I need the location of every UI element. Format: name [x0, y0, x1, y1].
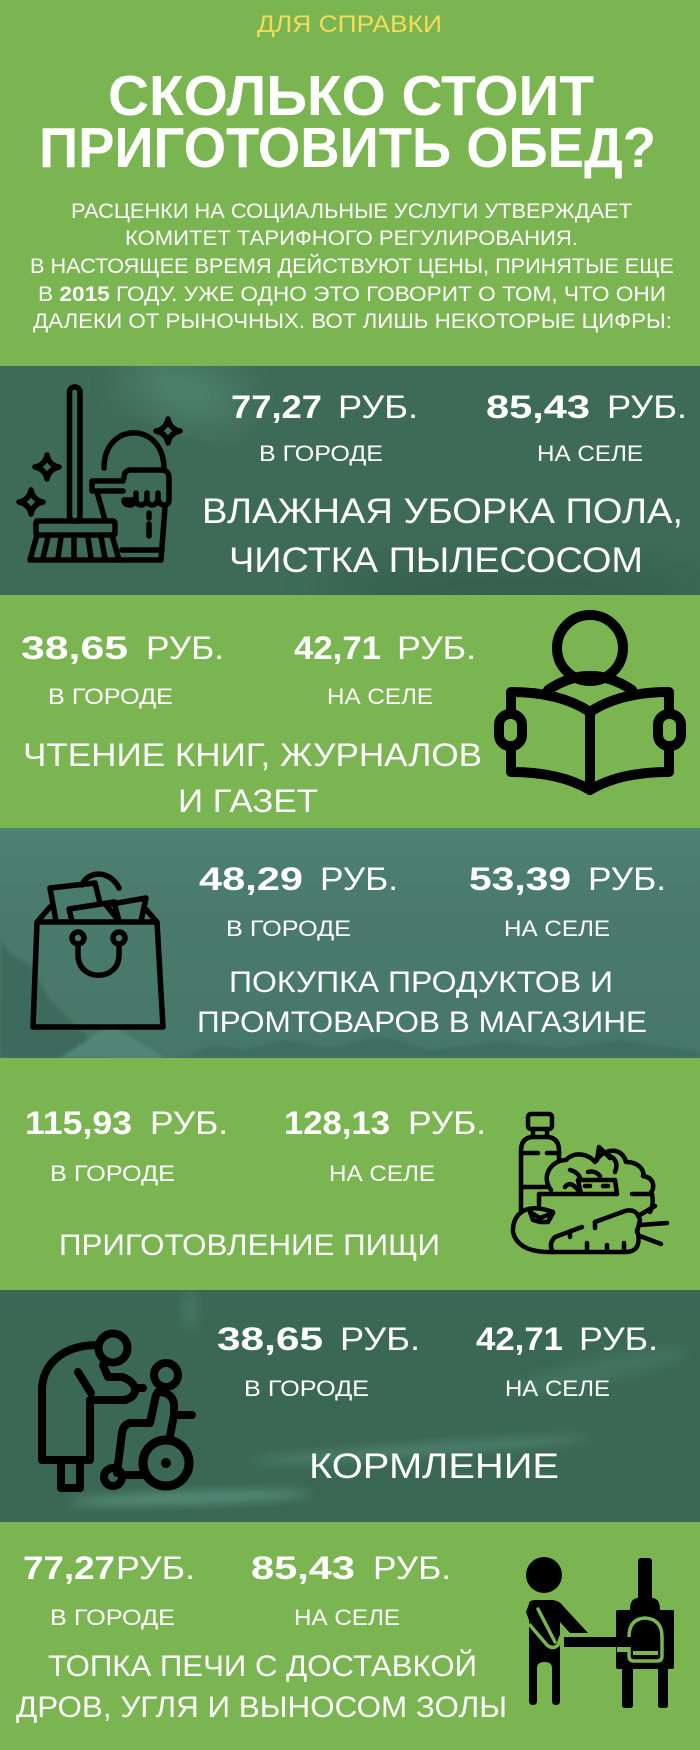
- heading: ЧИСТКА ПЫЛЕСОСОМ: [229, 541, 643, 580]
- icon: shopping bag: [33, 874, 163, 1027]
- prices: city: РУБ.: [338, 389, 418, 425]
- title: ПРИГОТОВИТЬ ОБЕД?: [39, 116, 656, 180]
- prices: city: [25, 1105, 228, 1186]
- intro text: КОМИТЕТ ТАРИФНОГО РЕГУЛИРОВАНИЯ.: [125, 227, 578, 250]
- heading: ТОПКА ПЕЧИ С ДОСТАВКОЙ: [48, 1649, 477, 1683]
- prices: village: 128,13: [284, 1105, 390, 1141]
- heading: ЧТЕНИЕ КНИГ, ЖУРНАЛОВ: [23, 737, 482, 773]
- prices: village: [294, 630, 476, 709]
- prices: city: [23, 1550, 195, 1630]
- prices: village: НА СЕЛЕ: [294, 1605, 400, 1630]
- heading: [202, 492, 683, 580]
- heading: [197, 966, 647, 1039]
- prices: village: НА СЕЛЕ: [327, 684, 433, 709]
- prices: city: В ГОРОДЕ: [259, 441, 383, 466]
- prices: city: 48,29: [199, 861, 303, 897]
- heading: [23, 737, 482, 819]
- kicker: ДЛЯ СПРАВКИ: [257, 11, 442, 38]
- heading: ДРОВ, УГЛЯ И ВЫНОСОМ ЗОЛЫ: [16, 1691, 507, 1724]
- prices: city: В ГОРОДЕ: [48, 684, 173, 709]
- heading: ПОКУПКА ПРОДУКТОВ И: [229, 966, 613, 999]
- prices: village: РУБ.: [579, 1321, 658, 1357]
- title: [39, 64, 656, 180]
- prices: village: НА СЕЛЕ: [537, 441, 643, 466]
- prices: city: В ГОРОДЕ: [50, 1605, 175, 1630]
- prices: village: РУБ.: [607, 389, 687, 425]
- prices: village: [486, 389, 687, 466]
- panel: feeding: [0, 1290, 700, 1522]
- prices: village: 85,43: [486, 389, 590, 425]
- prices: city: [21, 630, 224, 709]
- prices: village: 42,71: [476, 1321, 563, 1357]
- prices: city: 77,27: [231, 389, 322, 425]
- prices: village: НА СЕЛЕ: [329, 1161, 435, 1186]
- prices: village: 85,43: [251, 1550, 355, 1586]
- prices: village: [469, 861, 666, 941]
- heading: ВЛАЖНАЯ УБОРКА ПОЛА,: [202, 492, 683, 531]
- prices: city: [231, 389, 418, 466]
- prices: city: 77,27: [23, 1550, 115, 1586]
- icon: bottle, salad bowl and vegetables: [513, 1114, 667, 1252]
- icon: person stoking a stove: [526, 1557, 674, 1708]
- prices: city: РУБ.: [116, 1550, 195, 1586]
- title: СКОЛЬКО СТОИТ: [108, 64, 594, 128]
- heading: КОРМЛЕНИЕ: [309, 1447, 559, 1486]
- prices: village: РУБ.: [373, 1550, 451, 1586]
- heading: И ГАЗЕТ: [178, 783, 318, 819]
- prices: village: [476, 1321, 658, 1401]
- prices: village: 53,39: [469, 861, 571, 897]
- prices: city: РУБ.: [146, 630, 224, 666]
- prices: village: РУБ.: [397, 630, 476, 666]
- panel: floor cleaning: [0, 366, 700, 595]
- intro text: [30, 200, 674, 333]
- prices: city: РУБ.: [150, 1105, 228, 1141]
- heading: [16, 1649, 507, 1724]
- panel: reading: [21, 615, 681, 819]
- icon: person reading a book: [499, 615, 681, 790]
- prices: city: 115,93: [25, 1105, 132, 1141]
- prices: city: В ГОРОДЕ: [244, 1376, 369, 1401]
- panel: stove heating: [16, 1550, 674, 1724]
- prices: city: РУБ.: [340, 1321, 420, 1357]
- prices: village: НА СЕЛЕ: [505, 1376, 610, 1401]
- prices: village: [284, 1105, 486, 1186]
- prices: village: РУБ.: [588, 861, 666, 897]
- prices: village: [251, 1550, 451, 1630]
- prices: city: [217, 1321, 420, 1401]
- icon: caregiver with person in wheelchair: [42, 1334, 192, 1488]
- prices: city: РУБ.: [320, 861, 398, 897]
- intro text: ДАЛЕКИ ОТ РЫНОЧНЫХ. ВОТ ЛИШЬ НЕКОТОРЫЕ ЦИФРЫ:: [33, 310, 672, 333]
- panel: shopping: [0, 828, 700, 1058]
- prices: city: В ГОРОДЕ: [226, 916, 351, 941]
- prices: city: 38,65: [21, 630, 128, 666]
- prices: city: [199, 861, 398, 941]
- prices: village: РУБ.: [408, 1105, 486, 1141]
- prices: city: В ГОРОДЕ: [50, 1161, 175, 1186]
- prices: village: НА СЕЛЕ: [504, 916, 610, 941]
- icon: broom and bucket: [19, 387, 180, 560]
- heading: ПРИГОТОВЛЕНИЕ ПИЩИ: [59, 1229, 440, 1262]
- intro text: В НАСТОЯЩЕЕ ВРЕМЯ ДЕЙСТВУЮТ ЦЕНЫ, ПРИНЯТЫЕ ЕЩЕ: [30, 254, 674, 278]
- prices: city: 38,65: [217, 1321, 323, 1357]
- heading: ПРОМТОВАРОВ В МАГАЗИНЕ: [197, 1006, 647, 1039]
- intro text: В 2015 ГОДУ. УЖЕ ОДНО ЭТО ГОВОРИТ О ТОМ, ЧТО ОНИ: [38, 283, 666, 306]
- header: [30, 11, 674, 333]
- intro text: РАСЦЕНКИ НА СОЦИАЛЬНЫЕ УСЛУГИ УТВЕРЖДАЕТ: [71, 200, 632, 223]
- prices: village: 42,71: [294, 630, 381, 666]
- panel: cooking: [25, 1105, 667, 1262]
